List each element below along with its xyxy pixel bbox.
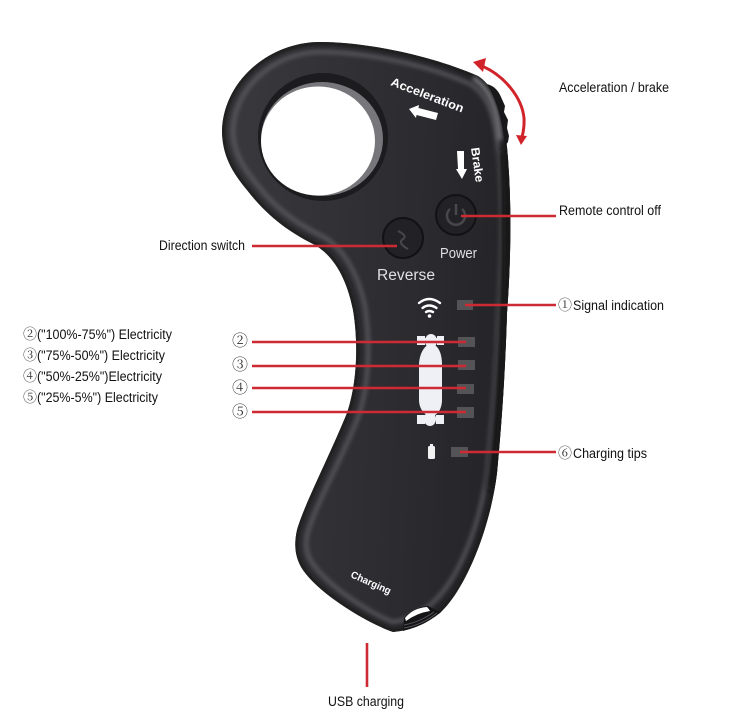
indicator lights	[451, 300, 475, 457]
legend: electricity levels: ④	[23, 366, 37, 386]
thumb wheel	[487, 84, 509, 146]
icon: skateboard battery gauge	[417, 334, 444, 426]
reverse button	[383, 218, 423, 258]
legend: electricity levels: ③	[23, 345, 37, 365]
red double arrow: acceleration and brake	[473, 58, 527, 145]
legend: electricity levels: ("25%-5%") Electricity	[37, 390, 158, 405]
legend: electricity levels: ②	[23, 324, 37, 344]
usb charging port	[403, 606, 440, 631]
thumb hole with grey rim	[258, 73, 388, 201]
circled number markers: ②	[232, 328, 248, 351]
remote control body	[222, 42, 510, 632]
callout: signal indication	[558, 295, 664, 315]
icon: battery	[428, 444, 435, 459]
callout: charging tips: ⑥	[558, 443, 572, 463]
legend: electricity levels: ("100%-75%") Electricity	[37, 327, 172, 342]
label: reverse: Reverse	[377, 267, 435, 284]
legend: electricity levels: ("75%-50%") Electricity	[37, 348, 165, 363]
bevel band	[222, 42, 510, 632]
legend: electricity levels: ("50%-25%")Electricity	[37, 369, 162, 384]
label: acceleration on device: Acceleration	[389, 75, 466, 115]
legend: electricity levels	[23, 324, 172, 407]
callout: direction switch: Direction switch	[159, 238, 245, 253]
legend: electricity levels: ⑤	[23, 387, 37, 407]
callout: acceleration / brake: Acceleration / brake	[559, 80, 669, 95]
icon: brake arrow	[456, 151, 467, 179]
callout: usb charging: USB charging	[328, 694, 404, 709]
power button	[436, 195, 476, 235]
red leader lines	[252, 216, 556, 687]
callout: charging tips: Charging tips	[573, 446, 647, 461]
callout: signal indication: Signal indication	[573, 298, 664, 313]
icon: acceleration arrow	[409, 105, 438, 120]
label: charging on device: Charging	[349, 570, 393, 597]
circled number markers: ③	[232, 352, 248, 375]
callout: signal indication: ①	[558, 295, 572, 315]
callout: remote control off: Remote control off	[559, 203, 661, 218]
circled number markers: ④	[232, 375, 248, 398]
label: power: Power	[440, 245, 477, 262]
circled number markers: ⑤	[232, 399, 248, 422]
icon: wifi signal	[419, 299, 440, 318]
circled number markers	[232, 328, 248, 422]
label: brake on device: Brake	[468, 146, 487, 183]
callout: charging tips	[558, 443, 647, 463]
